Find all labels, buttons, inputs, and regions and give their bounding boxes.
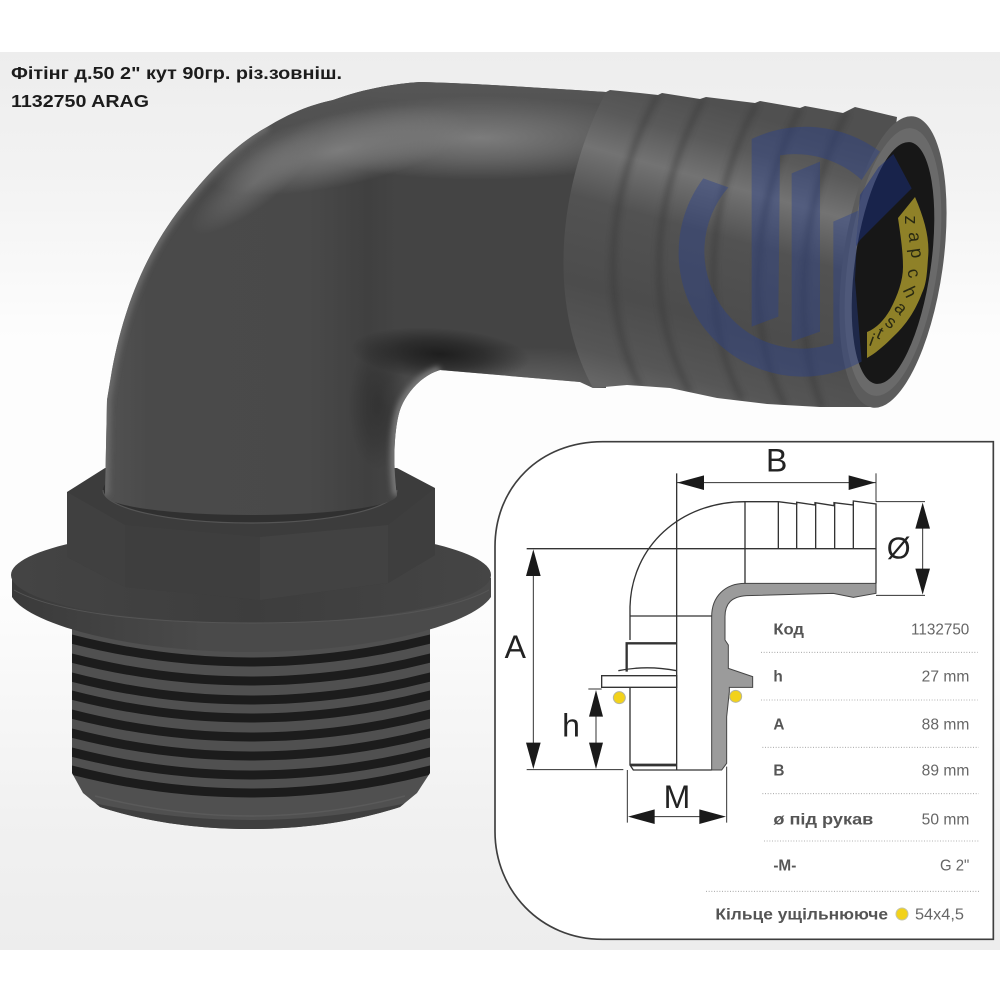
row: h bbox=[773, 669, 969, 686]
dimension B: B bbox=[766, 442, 787, 478]
male thread bbox=[72, 629, 430, 829]
row: M: -M- bbox=[773, 858, 796, 875]
row: B: 89 mm bbox=[922, 763, 969, 780]
dimension B bbox=[677, 442, 876, 502]
row: A: 88 mm bbox=[922, 716, 969, 733]
section wall bbox=[712, 583, 876, 770]
row: diameter: 50 mm bbox=[922, 811, 969, 828]
row: A: A bbox=[773, 716, 784, 733]
panel frame bbox=[495, 442, 993, 939]
watermark gold band: h bbox=[899, 283, 921, 301]
watermark gold band: a bbox=[905, 231, 925, 244]
watermark gold band: p bbox=[906, 247, 928, 259]
title: 1132750 ARAG bbox=[11, 91, 149, 111]
row: code bbox=[773, 621, 969, 638]
dimension diameter bbox=[876, 502, 930, 595]
dimension A bbox=[505, 549, 623, 770]
flange bbox=[11, 527, 491, 652]
row: seal ring: Кільце ущільнююче bbox=[715, 906, 888, 923]
dimension h bbox=[562, 689, 603, 769]
dimension M: M bbox=[664, 779, 690, 815]
fitting cross-section bbox=[527, 473, 876, 770]
elbow body bbox=[105, 82, 606, 515]
dimension M bbox=[627, 767, 727, 824]
row: seal ring bbox=[715, 906, 964, 923]
watermark gold band: t bbox=[874, 323, 886, 343]
row: h: 27 mm bbox=[922, 669, 969, 686]
row: h: h bbox=[773, 669, 783, 686]
row: M: G 2" bbox=[940, 858, 969, 875]
watermark gold band: s bbox=[882, 311, 900, 333]
dimension diameter: Ø bbox=[887, 531, 911, 565]
watermark gold band: i bbox=[867, 330, 877, 350]
pipe opening bbox=[823, 109, 963, 415]
seal ring markers bbox=[613, 690, 742, 704]
hex nut bbox=[67, 457, 435, 600]
dimension A: A bbox=[505, 629, 527, 665]
panel: specification drawing bbox=[495, 442, 993, 939]
spec table bbox=[706, 621, 979, 923]
outline bbox=[527, 473, 876, 770]
logo watermark bbox=[679, 127, 912, 377]
watermark gold band bbox=[867, 197, 928, 358]
row: diameter: ø під рукав bbox=[773, 811, 873, 828]
row: code: 1132750 bbox=[911, 621, 969, 638]
watermark gold band: c bbox=[903, 266, 925, 280]
title: Фітінг д.50 2" кут 90гр. різ.зовніш. bbox=[11, 63, 342, 83]
title bbox=[11, 63, 342, 111]
row: code: Код bbox=[773, 621, 804, 638]
watermark gold band: z bbox=[901, 216, 921, 224]
row: B bbox=[773, 763, 969, 780]
row: diameter bbox=[773, 811, 969, 828]
logo ring bbox=[679, 178, 862, 377]
row: seal ring: 54x4,5 bbox=[915, 906, 964, 923]
watermark gold band: a bbox=[890, 297, 912, 319]
barbed hose tail bbox=[563, 90, 963, 415]
row: A bbox=[773, 716, 969, 733]
product: threaded elbow fitting bbox=[11, 75, 963, 835]
logo bars bbox=[752, 127, 912, 362]
dimension h: h bbox=[562, 708, 580, 744]
row: B: B bbox=[773, 763, 784, 780]
row: M bbox=[773, 858, 969, 875]
